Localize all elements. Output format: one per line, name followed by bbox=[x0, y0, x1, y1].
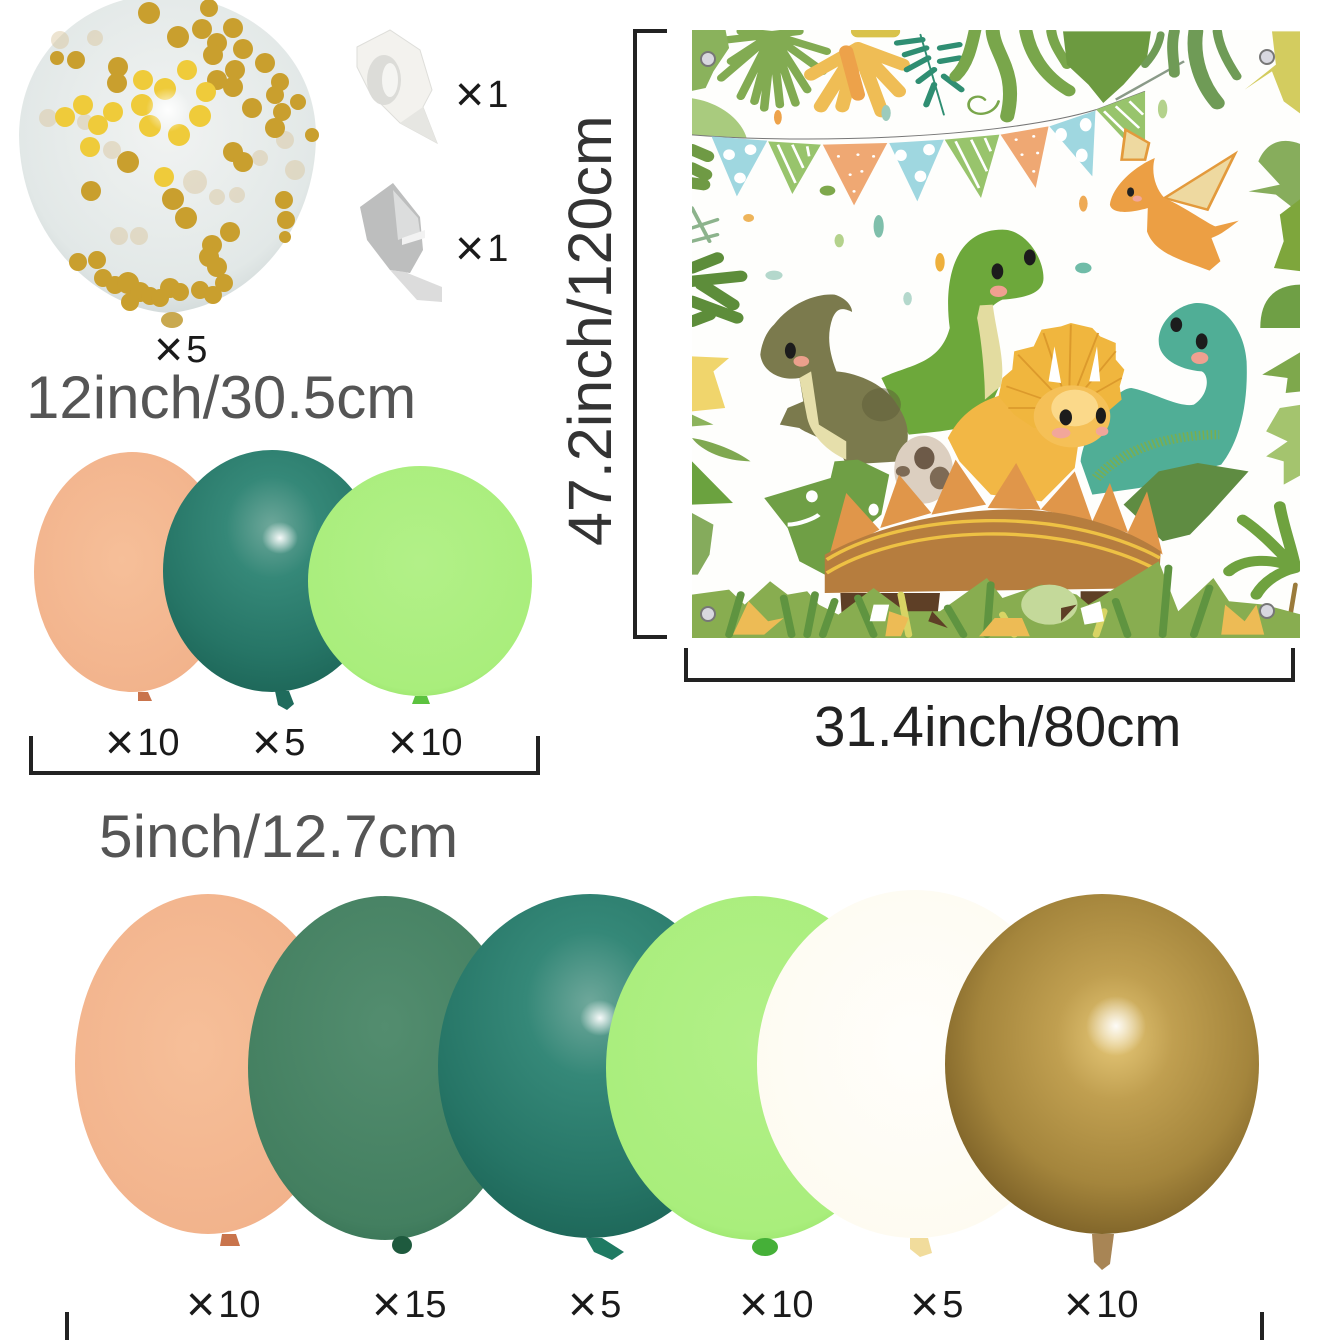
monstera left bbox=[764, 460, 889, 575]
label: x10: × bbox=[388, 714, 417, 770]
balloon: teal 12in bbox=[163, 450, 381, 710]
balloon: peach 5in bbox=[75, 894, 341, 1246]
label: x10: × bbox=[739, 1276, 768, 1332]
blue flag bbox=[889, 140, 944, 201]
label: x10: × bbox=[1064, 1276, 1093, 1332]
label: x10: 10 bbox=[1096, 1284, 1138, 1326]
characters and basket: lower area bbox=[692, 230, 1302, 638]
dimension: height: 47.2inch/120cm bbox=[556, 115, 624, 546]
green flag bbox=[1096, 91, 1145, 143]
balloon: teal 5in bbox=[438, 894, 742, 1260]
heading: 12 inch: 12inch/30.5cm bbox=[26, 364, 416, 431]
blue flag bbox=[1049, 111, 1095, 176]
balloon: peach 12in bbox=[34, 452, 230, 701]
confetti dots bbox=[743, 100, 1167, 305]
yellow flower bbox=[811, 31, 903, 111]
label: x5: 5 bbox=[284, 722, 305, 764]
balloon: lime 5in bbox=[606, 896, 904, 1256]
grommets bbox=[701, 50, 1274, 621]
label: x1: 1 bbox=[487, 74, 508, 116]
label: x1: 1 bbox=[487, 228, 508, 270]
label: x10: 10 bbox=[420, 722, 462, 764]
bracket: backdrop width bbox=[686, 648, 1293, 680]
label: x10: 10 bbox=[771, 1284, 813, 1326]
icon: balloon tape bbox=[360, 183, 442, 302]
palm tree bbox=[1229, 506, 1295, 631]
right foliage bbox=[1262, 351, 1302, 485]
corner leaves right bbox=[1245, 31, 1302, 115]
triceratops bbox=[948, 323, 1124, 501]
bracket: backdrop height bbox=[635, 31, 667, 637]
dinosaur: green bbox=[881, 230, 1043, 435]
left foliage bbox=[692, 356, 751, 575]
balloon: gold 5in bbox=[945, 894, 1259, 1270]
icon: glue dot roll bbox=[357, 30, 437, 143]
pterodactyl bbox=[1110, 130, 1239, 271]
teal fern bbox=[897, 35, 961, 115]
orange flag bbox=[823, 143, 887, 205]
heading: 5 inch: 5inch/12.7cm bbox=[99, 802, 458, 870]
label: x10: × bbox=[105, 714, 134, 770]
white gaps in undergrowth bbox=[870, 601, 1104, 625]
backdrop banner bbox=[690, 28, 1302, 638]
dinosaur: brown bbox=[760, 294, 908, 465]
balloon: lime 12in bbox=[308, 466, 532, 704]
palm fan bbox=[713, 31, 827, 108]
label: x5: 5 bbox=[186, 329, 207, 371]
left foliage bbox=[692, 150, 741, 321]
label: x5: 5 bbox=[600, 1284, 621, 1326]
label: x5: × bbox=[568, 1276, 597, 1332]
corner leaves left bbox=[690, 28, 729, 91]
dimension: width: 31.4inch/80cm bbox=[814, 695, 1181, 758]
long hanging leaves bbox=[956, 30, 1069, 116]
orange flag bbox=[1001, 126, 1049, 188]
blue flag bbox=[711, 136, 767, 196]
bracket ticks: 5 inch group bbox=[67, 1312, 1262, 1340]
label: x10: 10 bbox=[218, 1284, 260, 1326]
egg bbox=[894, 436, 953, 504]
undergrowth blades bbox=[729, 568, 1209, 635]
green flag bbox=[945, 135, 999, 198]
label: x1: × bbox=[455, 220, 484, 276]
dinosaur: teal bbox=[1081, 303, 1247, 495]
monstera leaf bbox=[1063, 31, 1151, 103]
balloon: sage 5in bbox=[248, 896, 522, 1254]
basket spikes bbox=[829, 460, 1163, 558]
dark leaf right bbox=[1124, 463, 1249, 541]
balloon: white 5in bbox=[757, 890, 1073, 1257]
label: x5: 5 bbox=[942, 1284, 963, 1326]
fern curl bbox=[1021, 585, 1077, 625]
bracket: 12 inch group bbox=[31, 736, 538, 773]
label: x5: × bbox=[252, 714, 281, 770]
vine bbox=[1116, 61, 1184, 100]
label: x5: × bbox=[154, 321, 183, 377]
bunting string bbox=[690, 91, 1145, 139]
right foliage bbox=[1249, 141, 1302, 328]
undergrowth bbox=[692, 561, 1302, 638]
striped arch leaf bbox=[690, 98, 747, 138]
right hanging leaves bbox=[1145, 31, 1237, 103]
dark gaps in undergrowth bbox=[928, 605, 1077, 628]
label: x10: 10 bbox=[137, 722, 179, 764]
label: x15: × bbox=[372, 1276, 401, 1332]
orange leaves in undergrowth bbox=[733, 601, 1264, 636]
basket shadow legs bbox=[840, 591, 1110, 612]
label: x1: × bbox=[455, 66, 484, 122]
basket bbox=[825, 510, 1161, 593]
foliage and bunting: upper area bbox=[690, 28, 1302, 328]
label: x15: 15 bbox=[404, 1284, 446, 1326]
label: x5: × bbox=[910, 1276, 939, 1332]
confetti balloon bbox=[19, 0, 319, 328]
green flag bbox=[768, 141, 821, 194]
label: x10: × bbox=[186, 1276, 215, 1332]
